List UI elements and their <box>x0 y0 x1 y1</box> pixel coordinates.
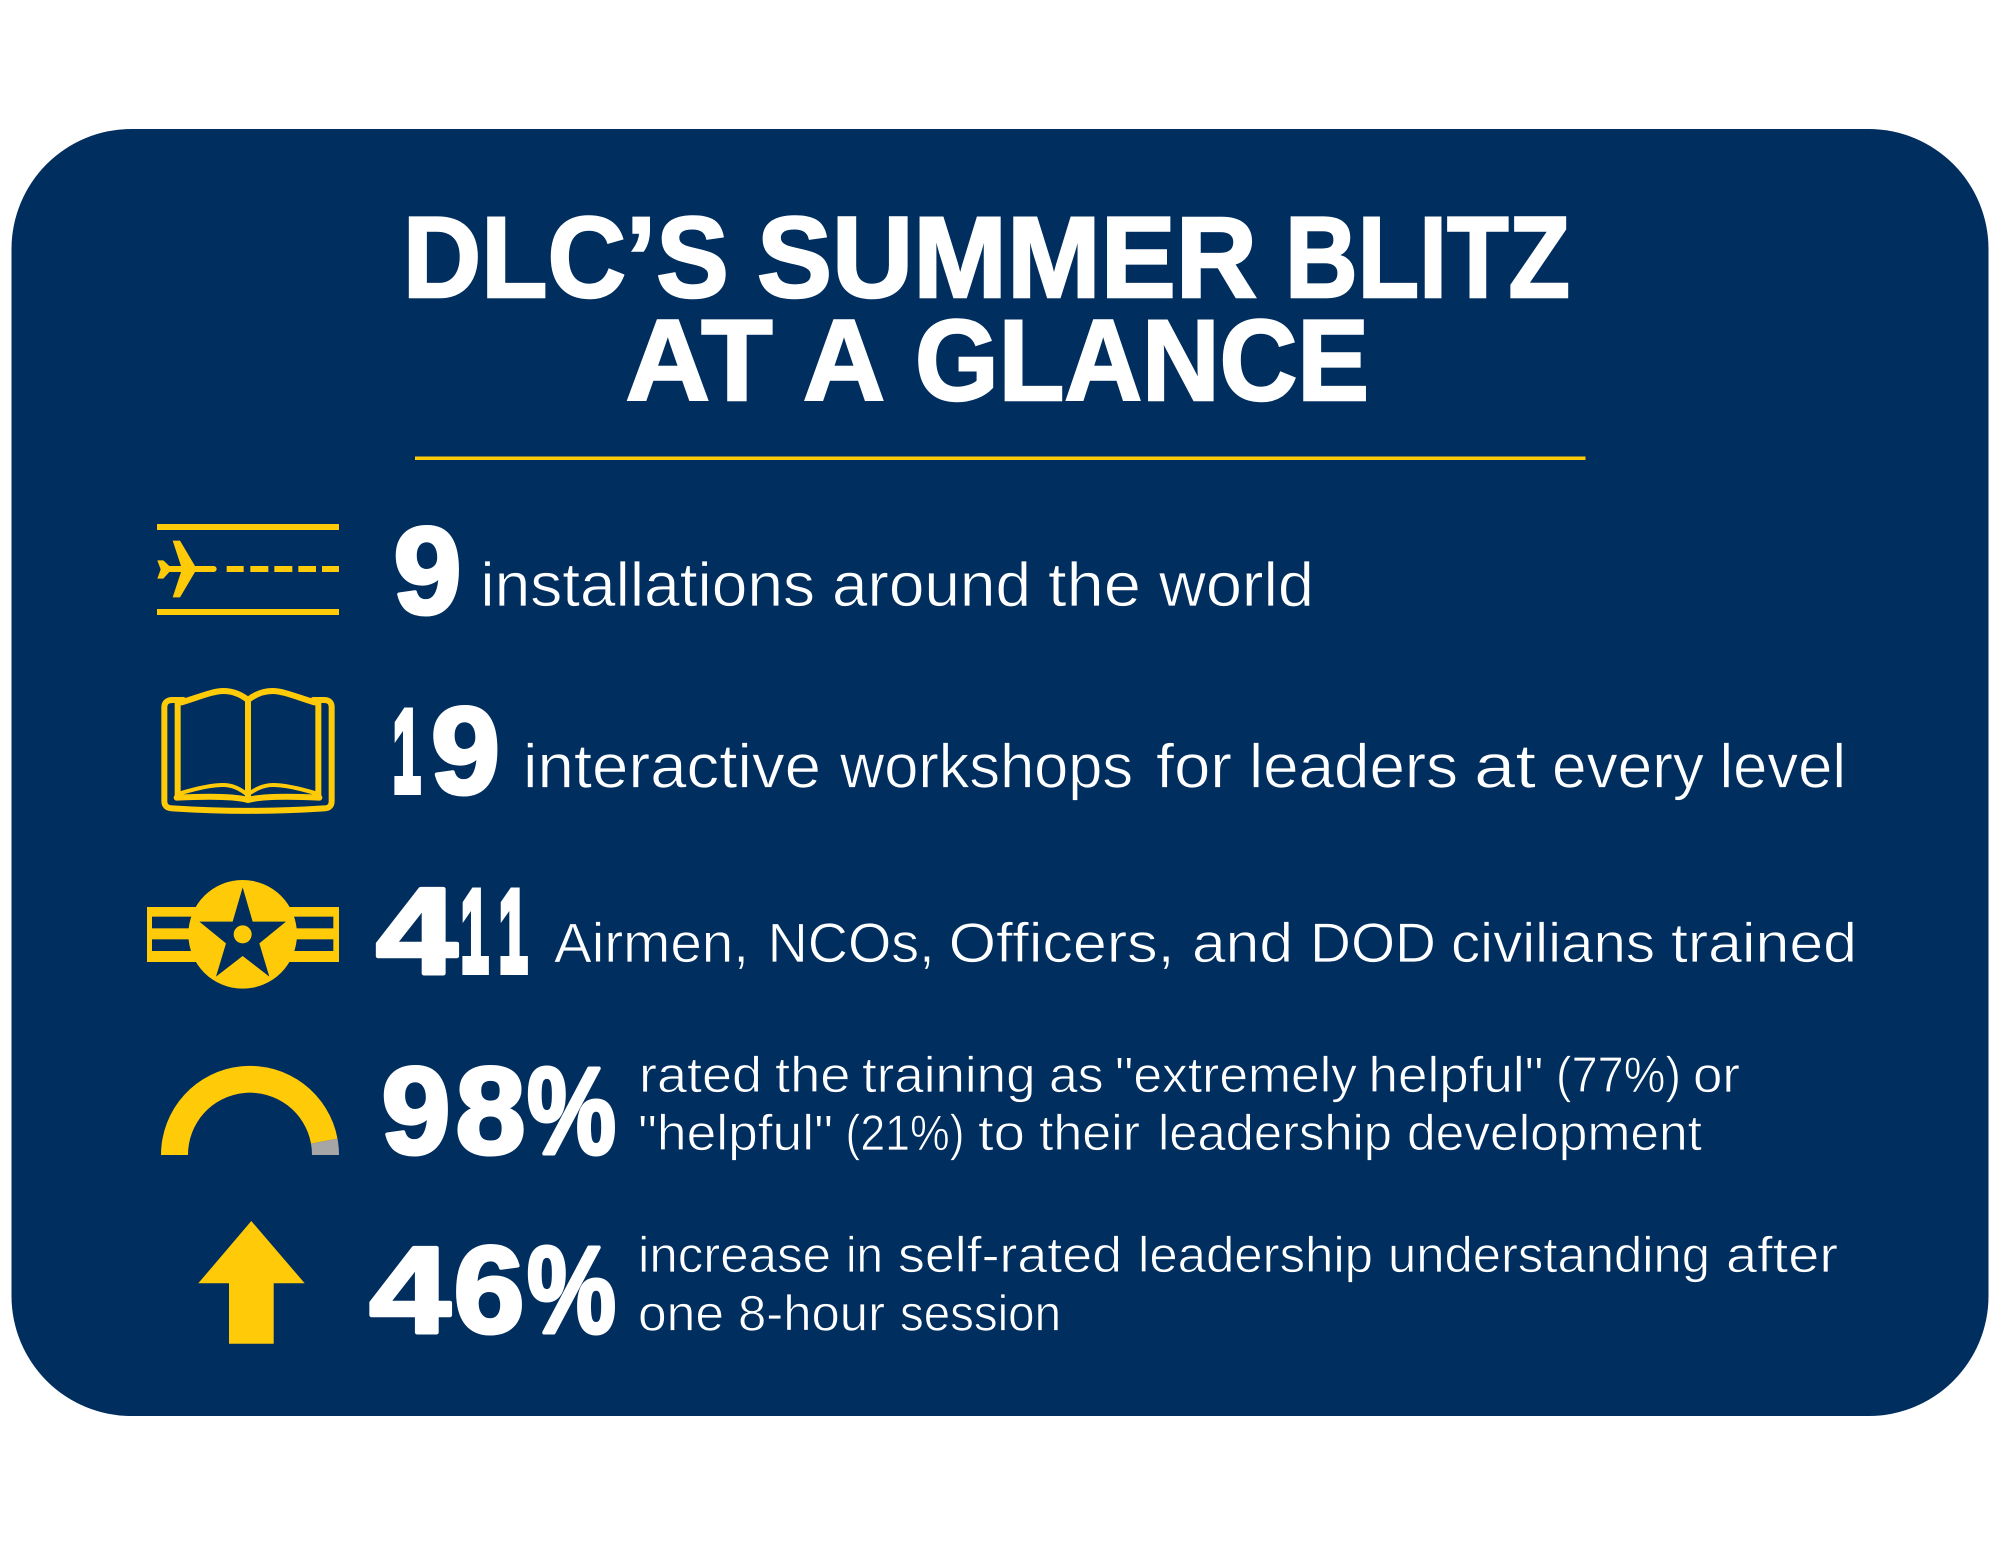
text: increase: in <box>846 1227 883 1283</box>
text: rated the training: to <box>978 1105 1025 1161</box>
text: rated the training: training <box>862 1047 1036 1103</box>
icon: air force roundel <box>147 880 339 989</box>
stat: 98%: 8 <box>456 1044 526 1180</box>
text: increase <box>638 1227 1838 1342</box>
text: increase: self-rated <box>898 1227 1122 1283</box>
title: A <box>803 297 885 425</box>
title <box>403 194 1570 425</box>
stat: 98%: % <box>527 1044 616 1180</box>
stat: 19 <box>393 684 500 820</box>
stat: 411: 4 <box>376 864 458 1000</box>
text: trained: civilians <box>1451 911 1655 974</box>
text: trained: Officers, <box>949 911 1175 974</box>
text: trained: DOD <box>1310 911 1436 974</box>
icon: airplane on runway <box>157 524 339 615</box>
text: increase: after <box>1726 1227 1838 1283</box>
text: workshops: every <box>1552 733 1704 802</box>
text: increase: 8-hour <box>738 1286 885 1342</box>
text: increase: increase <box>638 1227 831 1283</box>
text: rated the training: rated <box>639 1047 762 1103</box>
text: trained <box>554 911 1857 974</box>
text: installations: installations <box>480 551 815 620</box>
stat: 46%: 6 <box>454 1222 524 1360</box>
stat: 46% <box>370 1222 616 1360</box>
text: trained: and <box>1192 911 1293 974</box>
text: trained: NCOs, <box>768 911 935 974</box>
text: trained: Airmen, <box>554 911 749 974</box>
text: rated the training: the <box>775 1047 850 1103</box>
text: workshops: level <box>1720 733 1846 802</box>
stat: 19: 9 <box>431 684 500 820</box>
title: DLC’S <box>403 194 729 322</box>
text: increase: one <box>638 1286 724 1342</box>
stat: 411 <box>376 864 528 1000</box>
text: trained: trained <box>1671 911 1857 974</box>
text: rated the training: (21%) <box>846 1105 964 1161</box>
stat: 46%: 4 <box>370 1222 450 1360</box>
icon: open book <box>164 691 332 811</box>
text: workshops: for <box>1156 733 1232 802</box>
text: workshops: workshops <box>839 733 1133 802</box>
text: workshops <box>523 733 1846 802</box>
text: rated the training: "extremely <box>1115 1047 1357 1103</box>
text: rated the training: "helpful" <box>638 1105 833 1161</box>
title: AT <box>626 297 773 425</box>
text: rated the training: as <box>1049 1047 1104 1103</box>
text: rated the training: or <box>1693 1047 1740 1103</box>
text: rated the training: development <box>1407 1105 1702 1161</box>
text: workshops: interactive <box>523 733 821 802</box>
text: increase: understanding <box>1388 1227 1710 1283</box>
text: increase: session <box>900 1286 1061 1342</box>
title: GLANCE <box>915 297 1369 425</box>
stat: 19: 1 <box>393 686 421 816</box>
text: rated the training: leadership <box>1158 1105 1392 1161</box>
stat: 46%: % <box>527 1222 616 1360</box>
text: workshops: leaders <box>1249 733 1458 802</box>
stat: 411: 1 <box>461 866 489 996</box>
text: workshops: at <box>1474 733 1536 802</box>
title: SUMMER <box>757 194 1257 322</box>
text: installations: around <box>832 551 1031 620</box>
text: 1 <box>499 866 528 996</box>
icon: 98 percent gauge <box>161 1066 339 1155</box>
text: rated the training: (77%) <box>1556 1047 1681 1103</box>
text: rated the training: their <box>1039 1105 1140 1161</box>
icon: up arrow <box>198 1221 305 1344</box>
stat: 98%: 9 <box>382 1044 450 1180</box>
text: installations: world <box>1158 551 1314 620</box>
text: rated the training: helpful" <box>1368 1047 1544 1103</box>
text: installations: the <box>1048 551 1141 620</box>
text: rated the training <box>638 1047 1740 1161</box>
stat: 98% <box>382 1044 616 1180</box>
title: BLITZ <box>1285 194 1570 322</box>
text: increase: leadership <box>1138 1227 1373 1283</box>
title divider <box>415 456 1586 460</box>
stat: 9: 9 <box>394 504 462 640</box>
text: installations <box>480 551 1314 620</box>
